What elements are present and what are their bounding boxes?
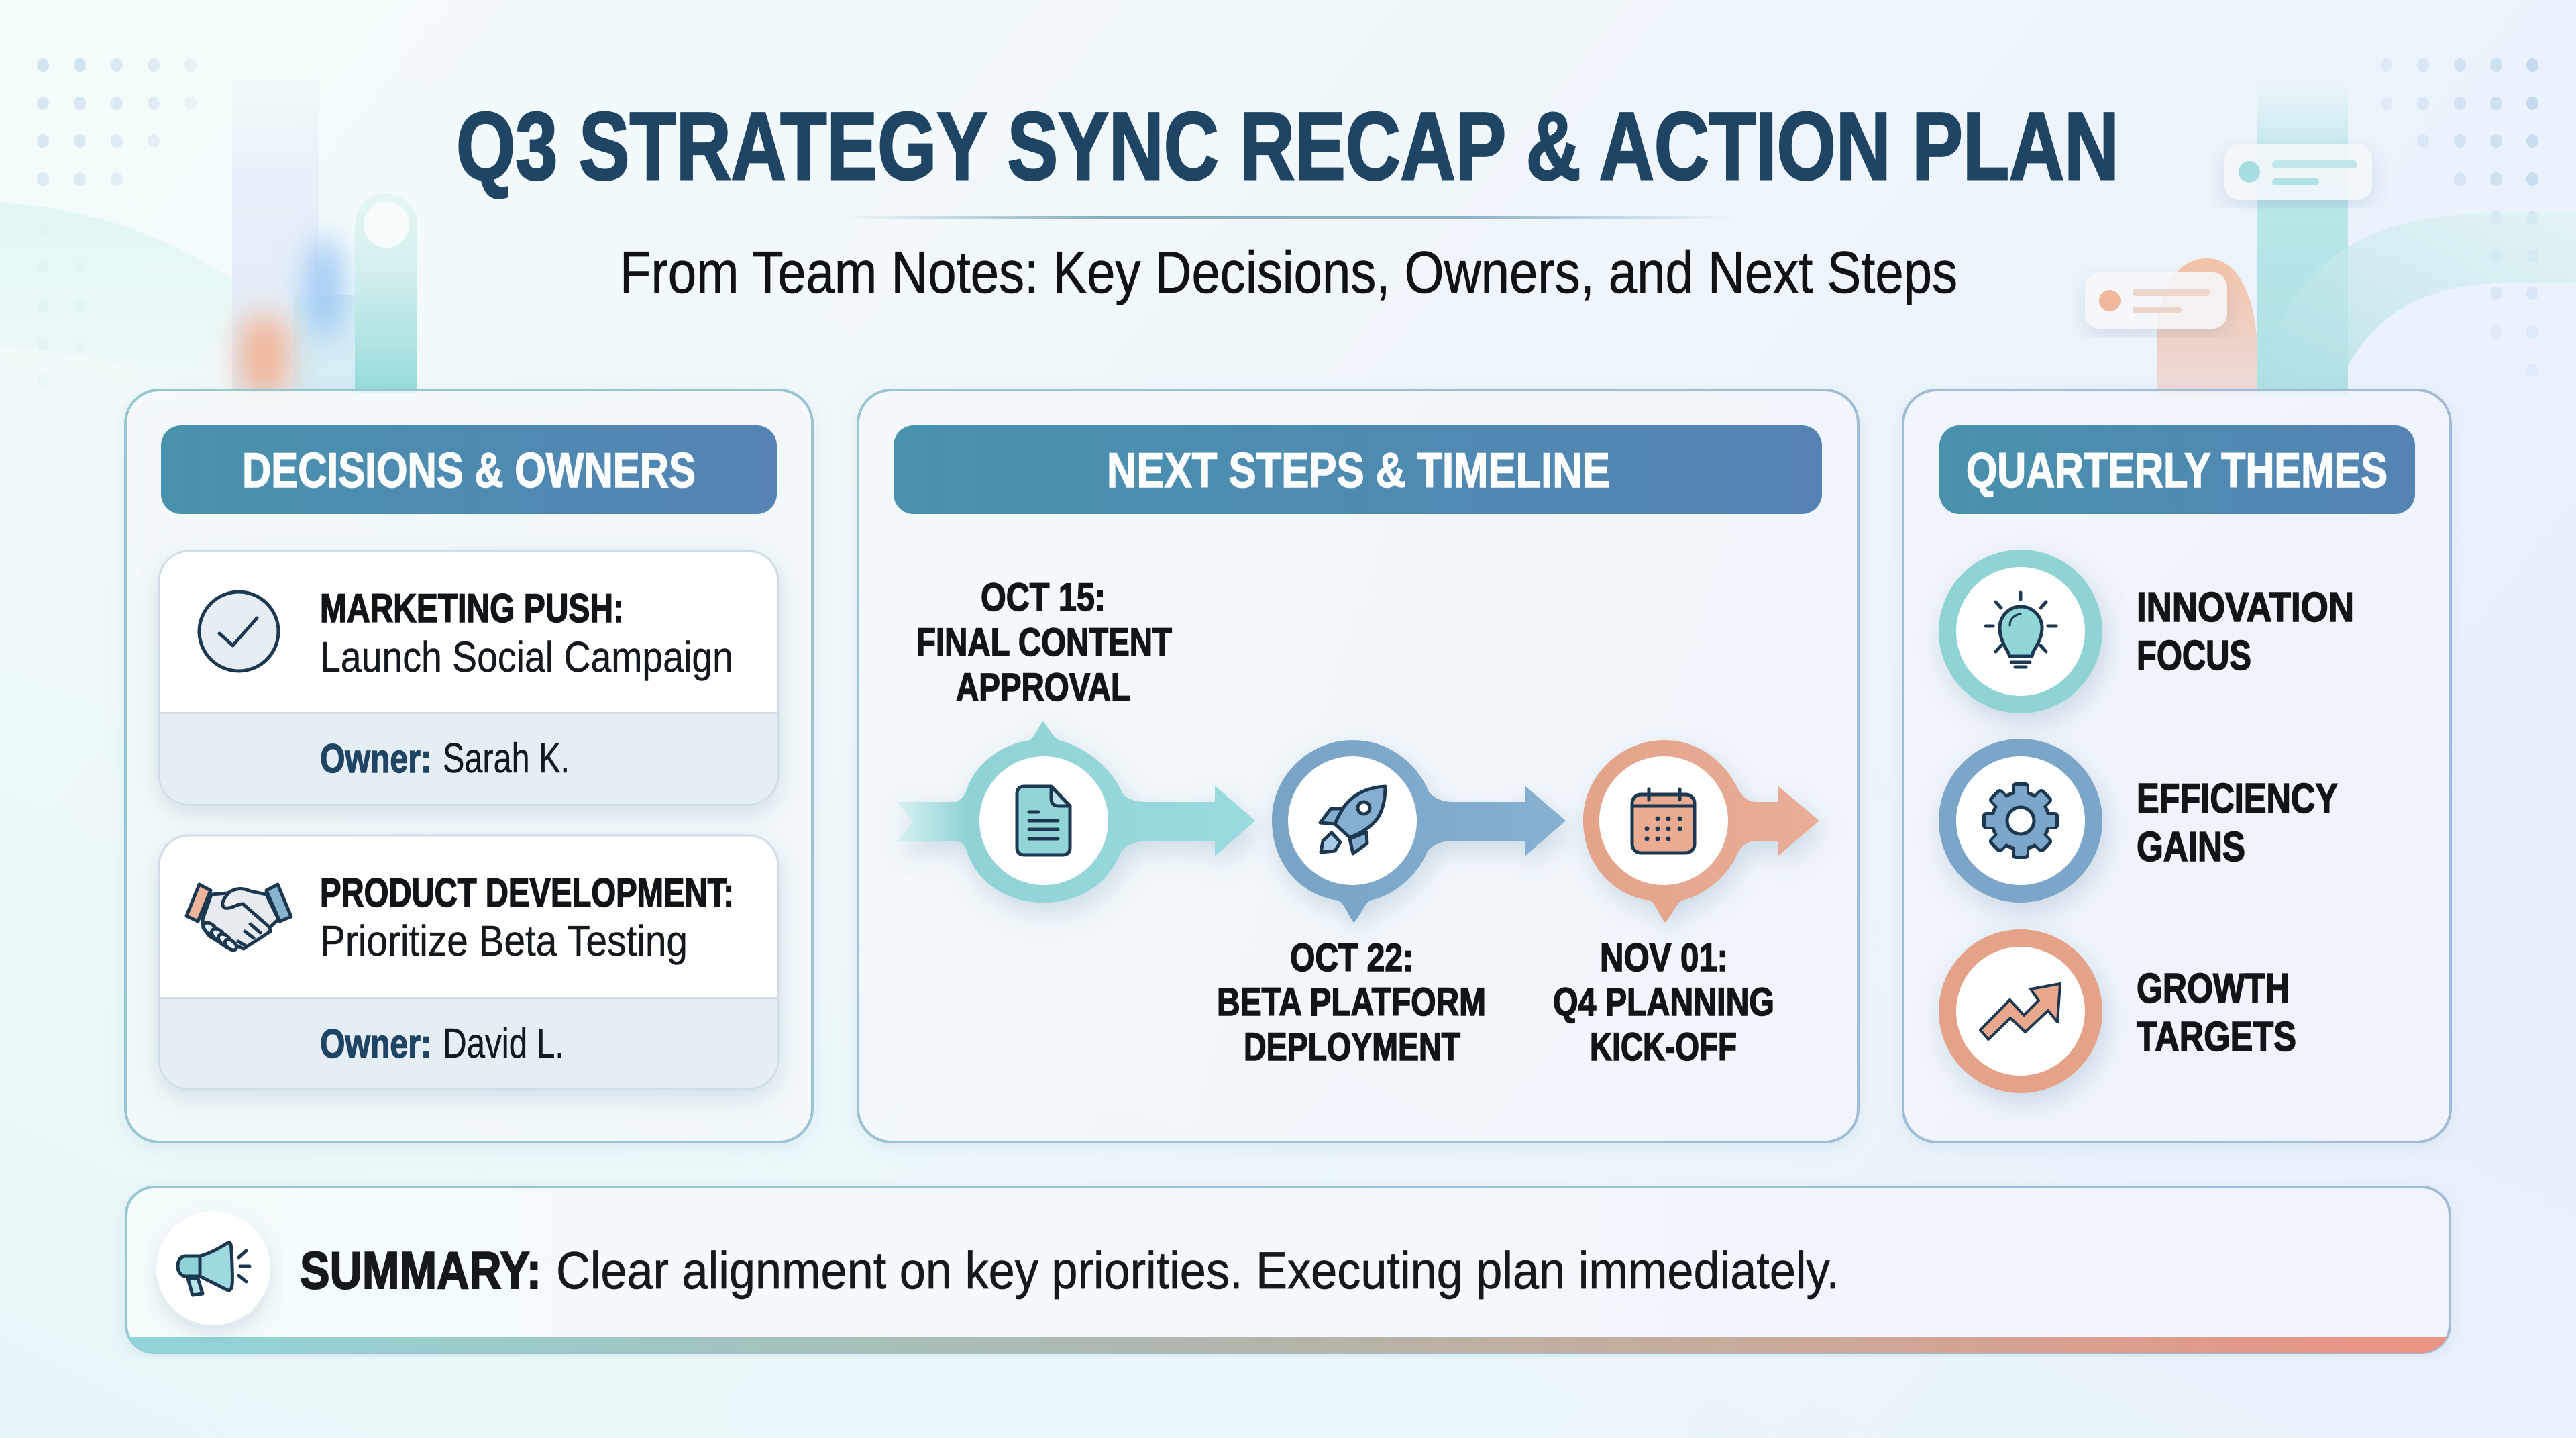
label: efficiency gains: GAINS	[2137, 824, 2245, 870]
card: product development	[159, 835, 778, 1089]
icon: light bulb in teal ring	[1939, 550, 2102, 713]
label: innovation focus: INNOVATION	[2137, 584, 2354, 631]
label: efficiency gains: EFFICIENCY	[2137, 776, 2338, 822]
label: growth targets	[2137, 966, 2296, 1060]
text: owner david	[320, 1021, 564, 1067]
panel: next steps and timeline	[858, 390, 1858, 1142]
summary text: Clear alignment on key priorities. Executing plan immediately.	[556, 1241, 1839, 1300]
text: prioritize beta testing: Prioritize Beta Testing	[320, 917, 688, 965]
label: growth targets: TARGETS	[2137, 1014, 2296, 1060]
icon: growth arrow in orange ring	[1939, 929, 2102, 1093]
icon circle: rocket	[1288, 756, 1417, 885]
title divider	[839, 216, 1737, 219]
card: marketing push	[159, 551, 778, 805]
icon circle: calendar	[1599, 756, 1728, 885]
text: owner sarah	[320, 735, 570, 782]
panel: quarterly themes	[1903, 390, 2451, 1142]
icon: handshake	[186, 884, 291, 952]
date label: oct 22: OCT 22:	[1290, 936, 1413, 980]
summary text: SUMMARY:	[300, 1241, 541, 1300]
theme: growth targets	[1939, 929, 2296, 1093]
background decoration: right dots, bars and floating cards	[2085, 58, 2576, 396]
heading: quarterly themes: QUARTERLY THEMES	[1966, 444, 2387, 498]
label: innovation focus	[2137, 584, 2354, 679]
date label: oct 15: FINAL CONTENT	[916, 621, 1172, 664]
text: marketing push: MARKETING PUSH:	[320, 586, 624, 631]
icon: megaphone	[156, 1211, 270, 1325]
heading: decisions and owners: DECISIONS & OWNERS	[242, 444, 696, 498]
label: innovation focus: FOCUS	[2137, 633, 2251, 679]
text: owner david: Owner:	[320, 1021, 431, 1066]
heading: quarterly themes	[1939, 425, 2415, 514]
node and arrow: blue	[1272, 740, 1566, 923]
text: launch social campaign: Launch Social Campaign	[320, 633, 733, 681]
icon circle: document	[979, 756, 1108, 885]
panel: summary	[126, 1187, 2450, 1353]
icon: check circle	[199, 592, 278, 671]
timeline step: oct 15	[897, 576, 1255, 903]
heading: next steps and timeline: NEXT STEPS & TIMELINE	[1107, 444, 1610, 498]
date label: nov 01: KICK-OFF	[1590, 1025, 1737, 1069]
background decoration: left dots and bars	[0, 58, 417, 396]
text: owner sarah: Sarah K.	[443, 735, 570, 782]
heading: decisions and owners	[161, 425, 777, 514]
date label: oct 22: BETA PLATFORM	[1217, 980, 1486, 1024]
gradient accent bar	[126, 1337, 2450, 1353]
date label: nov 01: Q4 PLANNING	[1553, 980, 1774, 1024]
node and arrow: teal	[897, 721, 1255, 903]
icon: gear in blue ring	[1939, 739, 2102, 903]
date label: oct 15: OCT 15:	[981, 576, 1106, 619]
text: owner david: David L.	[443, 1021, 564, 1067]
theme: efficiency gains	[1939, 739, 2338, 903]
date label: nov 01: NOV 01:	[1600, 936, 1728, 980]
timeline step: nov 01	[1553, 740, 1819, 1069]
label: growth targets: GROWTH	[2137, 966, 2290, 1012]
node and arrow: orange	[1583, 740, 1819, 923]
panel: decisions and owners	[125, 390, 812, 1142]
timeline step: oct 22	[1217, 740, 1566, 1069]
subtitle: From Team Notes: Key Decisions, Owners, and Next Steps	[620, 239, 1957, 305]
date label: oct 15: APPROVAL	[956, 666, 1130, 709]
heading: next steps and timeline	[894, 425, 1822, 514]
text: owner sarah: Owner:	[320, 736, 431, 781]
date label: nov 01	[1553, 936, 1774, 1069]
label: efficiency gains	[2137, 776, 2338, 870]
title: Q3 STRATEGY SYNC RECAP & ACTION PLAN	[456, 93, 2119, 200]
text: product development: PRODUCT DEVELOPMENT:	[320, 870, 734, 915]
date label: oct 15	[916, 576, 1172, 709]
theme: innovation focus	[1939, 550, 2354, 713]
date label: oct 22: DEPLOYMENT	[1244, 1025, 1460, 1069]
date label: oct 22	[1217, 936, 1486, 1069]
